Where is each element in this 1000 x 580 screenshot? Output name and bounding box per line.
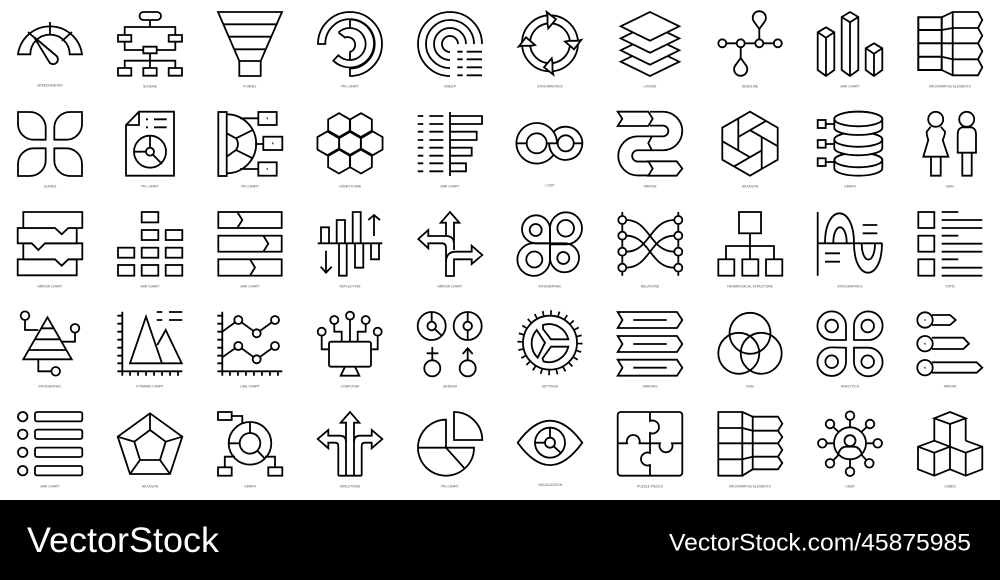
caption: SPEEDOMETER xyxy=(37,84,63,88)
caption: LINE CHART xyxy=(240,384,260,388)
caption: ARROW CHART xyxy=(438,284,462,288)
caption: VISUALIZATION xyxy=(538,483,563,487)
icon: pie chart document xyxy=(126,112,174,188)
icon: speedometer xyxy=(18,22,82,88)
caption: PYRAMID CHART xyxy=(136,384,164,388)
caption: COMPUTER xyxy=(341,384,360,388)
caption: BAR CHART xyxy=(840,84,860,88)
caption: HEXAGON xyxy=(142,484,159,488)
icon: list bar chart xyxy=(18,412,82,488)
caption: HIERARCHICAL STRUCTURE xyxy=(727,284,774,288)
caption: INFOGRAPHIC ELEMENTS xyxy=(929,84,972,88)
icon: donut graph xyxy=(218,412,282,488)
caption: RELATIONS xyxy=(641,284,660,288)
icon: woman and man xyxy=(923,112,976,188)
caption: PIE CHART xyxy=(141,184,159,188)
caption: DEADLINE xyxy=(742,84,759,88)
caption: ARROW CHART xyxy=(38,284,62,288)
icon: three way arrows xyxy=(418,212,482,288)
icon: circular arrows xyxy=(519,12,581,88)
caption: ARROW xyxy=(644,184,657,188)
icon: puzzle pieces xyxy=(618,412,682,488)
image id: VectorStock.com/45875985 xyxy=(669,530,971,556)
icon: computer network xyxy=(318,312,382,388)
caption: GENDER xyxy=(443,384,458,388)
caption: LOOP xyxy=(545,184,555,188)
caption: TOPIC xyxy=(945,284,956,288)
caption: SETTINGS xyxy=(542,384,559,388)
icon: wave infographics xyxy=(818,212,882,288)
caption: FUNNEL xyxy=(243,84,257,88)
icon: progress bars xyxy=(218,212,282,288)
caption: BAR CHART xyxy=(40,484,60,488)
icon: layers xyxy=(621,12,679,88)
icon: reflection chart xyxy=(318,212,382,288)
icon: venn rgb xyxy=(718,313,782,388)
caption: INFOGRAPHIC xyxy=(539,284,562,288)
footer band xyxy=(0,500,1000,580)
icon: gender xyxy=(418,312,482,388)
brand wordmark: VectorStock xyxy=(27,521,220,560)
icon: visualization eye xyxy=(518,421,582,487)
icon: block bar chart xyxy=(118,212,182,288)
caption: ANALYTICS xyxy=(841,384,860,388)
caption: PIE CHART xyxy=(241,184,259,188)
caption: INFOGRAPHIC xyxy=(39,384,62,388)
caption: SWEEP xyxy=(444,84,457,88)
caption: USER xyxy=(845,484,855,488)
caption: ARROW xyxy=(944,384,957,388)
icon: deadline xyxy=(718,11,782,89)
icon: pyramid chart xyxy=(117,312,182,388)
icon: loop xyxy=(516,123,582,188)
icon: arrows with lines xyxy=(618,312,682,388)
caption: LAYERS xyxy=(644,84,657,88)
icon: analytics xyxy=(817,311,883,388)
caption: DIRECTIONS xyxy=(340,484,361,488)
icon: cubes xyxy=(918,412,982,488)
caption: INFOGRAPHICS xyxy=(537,84,563,88)
icon: leaves xyxy=(18,112,82,188)
icon: hierarchical structure xyxy=(718,212,782,288)
caption: HONEYCOMB xyxy=(339,184,362,188)
icon: user network xyxy=(818,411,882,488)
caption: HEXAGON xyxy=(742,184,759,188)
icon: line chart xyxy=(217,312,282,388)
icon: arrow tags xyxy=(917,312,982,388)
icon: funnel xyxy=(218,12,282,88)
icon: infographic elements xyxy=(918,12,982,88)
icon: scheme xyxy=(118,12,182,88)
icon: pyramid infographic xyxy=(21,311,79,388)
icon: pie chart with boxes xyxy=(218,112,282,188)
caption: RGB xyxy=(746,384,754,388)
caption: PIE CHART xyxy=(341,84,359,88)
icon: sweep xyxy=(418,12,482,88)
icon: horizontal bar chart xyxy=(418,112,482,188)
icon: pie chart rings xyxy=(318,12,382,88)
icon: pentagon radar xyxy=(118,413,182,488)
caption: PIE CHART xyxy=(441,484,459,488)
icon: exploded pie chart xyxy=(418,412,482,488)
caption: GRAPH xyxy=(844,184,856,188)
caption: CUBES xyxy=(944,484,956,488)
icon: butterfly infographic xyxy=(517,212,582,288)
caption: INFOGRAPHICS xyxy=(837,284,863,288)
icon: snake arrow xyxy=(618,112,682,188)
icon: hexagon aperture xyxy=(722,112,778,188)
icon: arrow chart stacked xyxy=(18,212,82,288)
icon: settings gear xyxy=(520,313,580,388)
caption: BAR CHART xyxy=(240,284,260,288)
caption: PUZZLE PIECES xyxy=(637,484,664,488)
icon: database graph xyxy=(818,112,882,188)
caption: GRAPH xyxy=(244,484,256,488)
caption: REFLECTION xyxy=(340,284,361,288)
icon: topic list xyxy=(918,212,982,288)
icon: directions xyxy=(318,412,382,488)
caption: LEAVES xyxy=(44,184,57,188)
caption: MAN xyxy=(946,184,954,188)
caption: SCHEME xyxy=(143,84,158,88)
caption: BAR CHART xyxy=(140,284,160,288)
icon: honeycomb xyxy=(317,113,383,188)
caption: BAR CHART xyxy=(440,184,460,188)
icon: 3d bar chart xyxy=(818,12,882,88)
caption: INFOGRAPHIC ELEMENTS xyxy=(729,484,772,488)
caption: ARROWS xyxy=(643,384,658,388)
icon: infographic elements variant xyxy=(718,412,782,488)
icon: relations xyxy=(618,212,682,288)
